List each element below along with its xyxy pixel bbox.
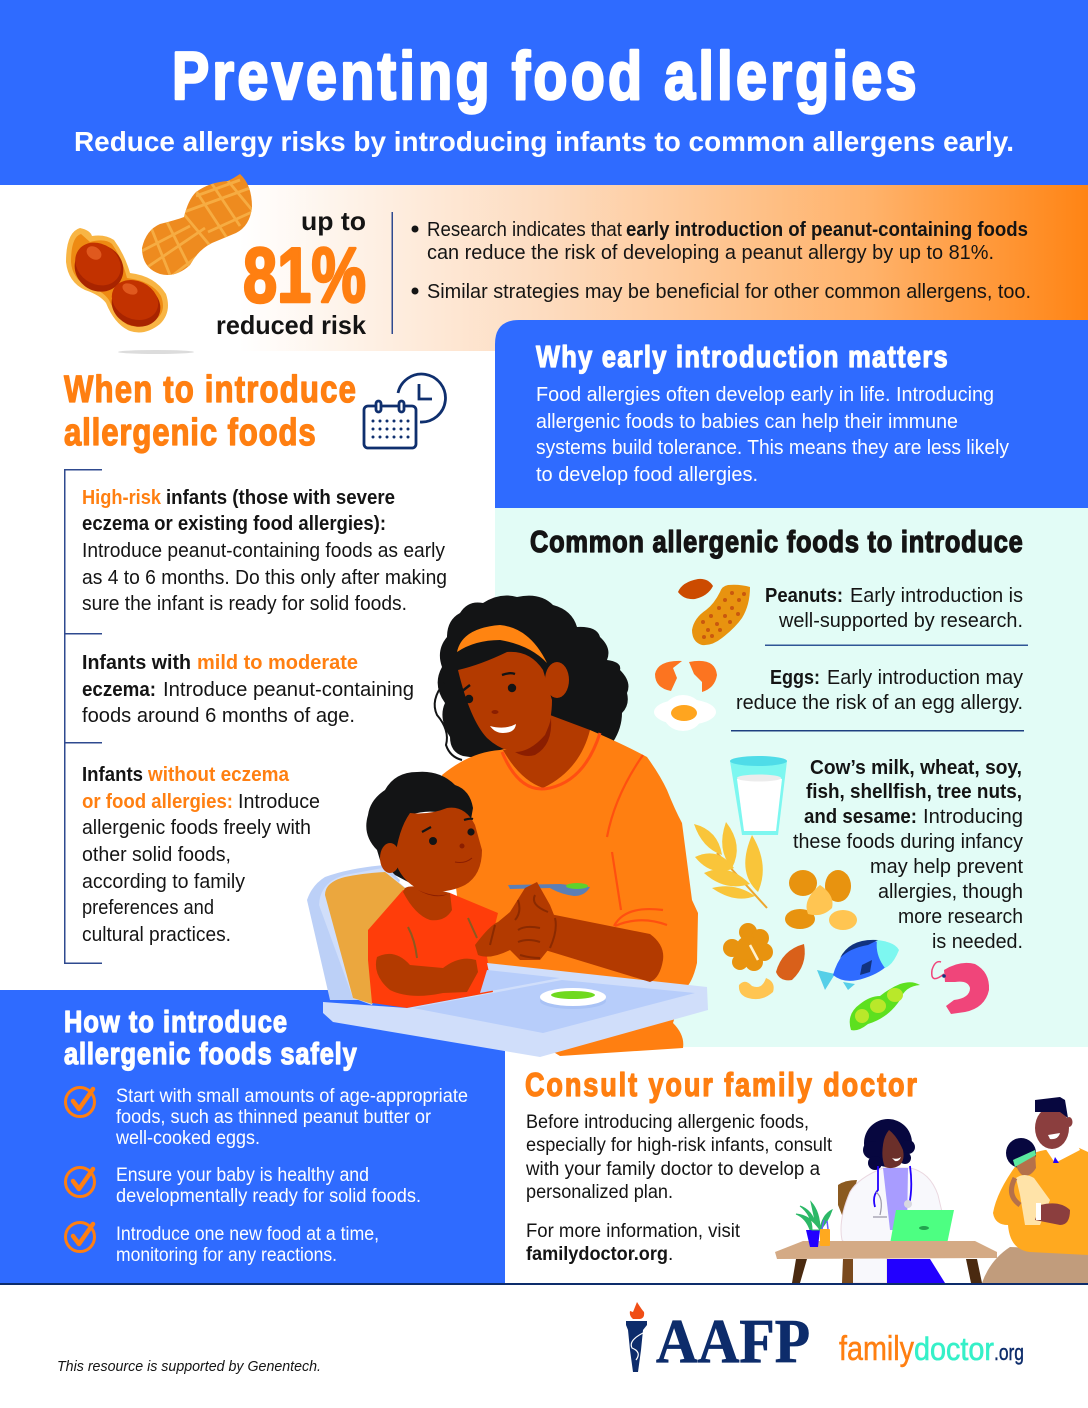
child arm: [376, 954, 478, 996]
text block: high-risk infants: sure the infant is ready for solid foods.: [82, 593, 407, 615]
bullet: research finding: early introduction of peanut-containing foods: [626, 219, 1028, 241]
text block: high-risk infants: infants (those with severe: [166, 487, 395, 509]
text block: high-risk infants: Introduce peanut-containing foods as early: [82, 540, 445, 562]
more information text: familydoctor.org: [526, 1244, 668, 1265]
item: peanuts: Early introduction is: [850, 585, 1023, 607]
item: other allergens: may help prevent: [870, 856, 1023, 878]
item: other allergens: Introducing: [923, 806, 1023, 828]
text block: mild to moderate eczema: Introduce peanut-containing: [163, 679, 414, 701]
logo: familydoctor.org: [839, 1330, 1024, 1368]
stat: up to 81% reduced risk: 81%: [243, 231, 366, 319]
item: other allergens: more research: [898, 906, 1023, 928]
subtitle: Reduce allergy risks by introducing infants to common allergens early.: [74, 126, 1014, 157]
item: other allergens: these foods during infancy: [793, 831, 1023, 853]
tip: small amounts: foods, such as thinned peanut butter or: [116, 1107, 432, 1128]
panel: consult your family doctor: [505, 1047, 1088, 1284]
tip: one new food: Introduce one new food at a time,: [116, 1224, 379, 1245]
child shirt: [368, 890, 498, 1008]
tip: small amounts: Start with small amounts of age-appropriate: [116, 1086, 468, 1107]
icon: wheat: [694, 822, 767, 908]
plant and cup: [806, 1230, 820, 1247]
icon: tree nuts: [723, 923, 805, 999]
panel: why early introduction matters: [495, 320, 1088, 508]
mother hair: [438, 595, 628, 760]
trousers: [887, 1259, 945, 1283]
body text: systems build tolerance. This means they are less likely: [536, 437, 1009, 459]
text block: without eczema: preferences and: [82, 897, 214, 919]
illustration: mother feeding child: [307, 595, 708, 1057]
high chair back: [307, 865, 410, 1005]
bullet: research finding: Research indicates that: [427, 219, 622, 241]
panel: 81% statistic band: [0, 174, 1088, 354]
mother shirt: [442, 730, 698, 1056]
text block: mild to moderate eczema: [82, 652, 414, 727]
icon: peanuts: [65, 174, 252, 354]
body text: allergenic foods to babies can help their immune: [536, 411, 958, 433]
item: other allergens: and sesame:: [804, 806, 917, 828]
text block: without eczema: Introduce: [238, 791, 320, 813]
header banner: [0, 0, 1088, 185]
text block: without eczema: [82, 764, 320, 946]
text block: high-risk infants: as 4 to 6 months. Do this only after making: [82, 567, 447, 589]
footer credit: This resource is supported by Genentech.: [57, 1358, 321, 1375]
hands: [475, 882, 558, 960]
child face: [380, 808, 482, 896]
icon: egg: [654, 661, 717, 731]
item: eggs: [736, 667, 1023, 714]
text block: high-risk infants: eczema or existing food allergies):: [82, 513, 386, 535]
icon: soybeans: [785, 870, 857, 930]
icon: shrimp: [932, 962, 989, 1014]
stat: up to 81% reduced risk: reduced risk: [216, 310, 367, 340]
more information text: .: [668, 1244, 673, 1265]
mother forearm: [540, 912, 663, 982]
heading: Consult your family doctor: [525, 1068, 917, 1104]
text block: without eczema: cultural practices.: [82, 924, 231, 946]
mother neck and neckline: [502, 715, 600, 789]
heading: Why early introduction matters: [536, 340, 948, 375]
text block: without eczema: allergenic foods freely with: [82, 817, 311, 839]
stat: up to 81% reduced risk: [216, 206, 367, 340]
item: other allergens: [793, 757, 1023, 953]
text block: mild to moderate eczema: Infants with: [82, 652, 191, 674]
logo: familydoctor.org: .org: [994, 1340, 1024, 1365]
heading: Common allergenic foods to introduce: [530, 525, 1023, 560]
item: other allergens: allergies, though: [878, 881, 1023, 903]
tip: one new food: [66, 1222, 379, 1266]
illustration: doctor at desk: [775, 1119, 997, 1283]
heading: when to introduce: [64, 369, 356, 454]
more information text: For more information, visit: [526, 1221, 741, 1242]
text block: without eczema: without eczema: [147, 764, 290, 786]
heading: [64, 1005, 357, 1072]
item: peanuts: well-supported by research.: [778, 610, 1023, 632]
item: peanuts: [765, 585, 1023, 632]
body text: [536, 384, 1009, 486]
text block: mild to moderate eczema: eczema:: [82, 679, 156, 701]
item: eggs: Eggs:: [770, 667, 820, 689]
bullet: research finding: [412, 219, 1028, 264]
spoon: [508, 883, 590, 896]
tip: small amounts: well-cooked eggs.: [115, 1128, 260, 1149]
body text: with your family doctor to develop a: [525, 1159, 820, 1180]
title: Preventing food allergies: [172, 39, 917, 114]
heading: allergenic foods safely: [64, 1037, 357, 1072]
icon: calendar and clock: [364, 374, 445, 448]
child neck: [403, 886, 452, 920]
stat: up to 81% reduced risk: up to: [301, 206, 366, 236]
laptop: [890, 1210, 954, 1244]
bullet: other allergens: Similar strategies may be beneficial for other common allergens, too.: [427, 281, 1031, 303]
item: peanuts: Peanuts:: [765, 585, 843, 607]
text block: without eczema: or food allergies:: [82, 791, 233, 813]
mother face: [457, 625, 569, 752]
tip: healthy and ready: developmentally ready for solid foods.: [116, 1186, 421, 1207]
icon: peanut: [678, 579, 750, 645]
heading: when to introduce: When to introduce: [64, 369, 356, 411]
text block: high-risk infants: [82, 487, 447, 615]
logo: familydoctor.org: doctor: [914, 1331, 994, 1367]
body text: especially for high-risk infants, consult: [526, 1135, 833, 1156]
more information text: [526, 1221, 741, 1265]
icon: edamame: [850, 982, 920, 1030]
baby: [1006, 1138, 1070, 1225]
shirt folds: [607, 755, 667, 926]
text block: mild to moderate eczema: mild to moderate: [197, 652, 358, 674]
text block: mild to moderate eczema: foods around 6 months of age.: [82, 705, 355, 727]
panel: common allergenic foods: [495, 508, 1088, 1047]
body text: to develop food allergies.: [536, 464, 758, 486]
desk: [775, 1241, 997, 1259]
text block: without eczema: other solid foods,: [82, 844, 231, 866]
divider: [0, 1283, 1088, 1285]
item: other allergens: fish, shellfish, tree nuts,: [806, 781, 1022, 803]
icon: fish: [817, 940, 899, 990]
text block: without eczema: according to family: [82, 871, 245, 893]
body text: Before introducing allergenic foods,: [526, 1112, 809, 1133]
panel: how to introduce safely: [0, 990, 505, 1284]
item: eggs: Early introduction may: [827, 667, 1023, 689]
logo: AAFP: AAFP: [656, 1308, 810, 1376]
logo: familydoctor.org: family: [839, 1330, 914, 1368]
text block: without eczema: Infants: [82, 764, 143, 786]
body text: Food allergies often develop early in life. Introducing: [536, 384, 994, 406]
illustration: father and baby: [982, 1097, 1088, 1283]
body text: [525, 1112, 833, 1203]
bullet: research finding: can reduce the risk of developing a peanut allergy by up to 81%.: [427, 242, 994, 264]
high chair tray: [323, 963, 708, 1057]
text block: high-risk infants: High-risk: [82, 487, 162, 509]
heading: How to introduce: [64, 1005, 287, 1040]
tip: healthy and ready: [66, 1165, 421, 1207]
tip: one new food: monitoring for any reactions.: [116, 1245, 337, 1266]
body text: personalized plan.: [526, 1182, 673, 1203]
heading: when to introduce: allergenic foods: [64, 412, 316, 454]
icon: milk glass: [730, 756, 787, 835]
bracket rules: [64, 469, 102, 964]
tip: healthy and ready: Ensure your baby is healthy and: [116, 1165, 369, 1186]
item: other allergens: Cow’s milk, wheat, soy,: [810, 757, 1022, 779]
item: eggs: reduce the risk of an egg allergy.: [736, 692, 1023, 714]
item: other allergens: is needed.: [932, 931, 1023, 953]
tip: small amounts: [66, 1086, 468, 1149]
child hair: [366, 772, 473, 883]
